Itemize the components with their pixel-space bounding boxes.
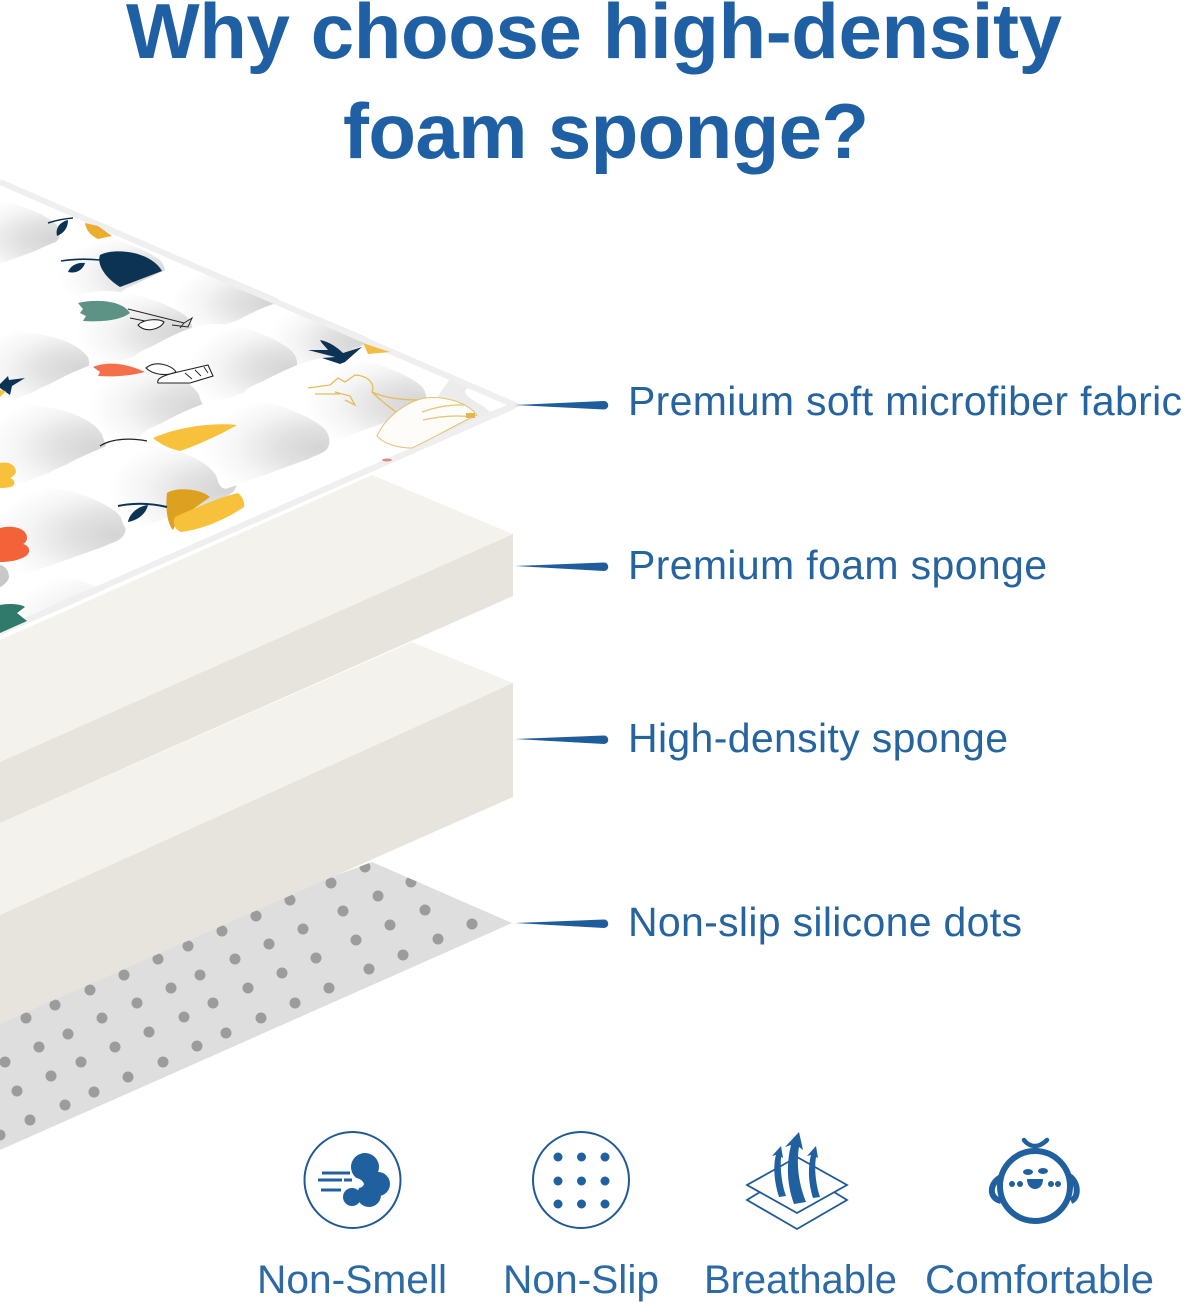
label: non-smell: Non-Smell [257,1258,447,1302]
print: navy fruit [61,251,162,287]
print: orange blob [0,527,29,562]
label: breathable: Breathable [704,1258,897,1302]
leader line: high-density sponge [515,736,608,744]
label: comfortable: Comfortable [925,1258,1154,1302]
print: hand shape [377,398,477,448]
layer: non-slip silicone dots [0,862,512,1150]
print: gray blob [0,565,9,587]
label: non-slip: Non-Slip [503,1258,659,1302]
leader line: silicone dots [515,920,608,928]
icon: non-smell [304,1132,400,1228]
layer: microfiber fabric [0,178,522,669]
label: high-density sponge: High-density sponge [628,715,1008,761]
fabric edge band [0,182,514,632]
print: yellow fruit [118,489,244,532]
layer: premium foam sponge [0,475,513,823]
print: left yellow blob [0,462,16,488]
print: teal flower with outline leaves [78,301,192,330]
icon: breathable [747,1132,847,1229]
label: foam sponge: Premium foam sponge [628,542,1047,588]
print: teal blob [0,604,27,633]
print: orange flower with outline leaves [93,364,213,383]
fabric prints [0,218,477,633]
quilting pattern [0,208,521,620]
icon: comfortable baby face [992,1140,1077,1221]
print: carrot [100,424,237,451]
print: giraffe outline [308,375,421,416]
title [126,0,1062,175]
layer: high-density sponge [0,642,513,1024]
leader line: fabric [515,401,608,410]
print: small leaf and yellow piece [48,218,112,239]
title: foam sponge? [343,87,869,175]
print: navy bird plant [308,340,390,364]
label: fabric: Premium soft microfiber fabric [628,378,1182,424]
label: silicone dots: Non-slip silicone dots [628,899,1022,945]
print: left edge plant [0,376,25,395]
print: small pink mark [382,458,392,462]
leader line: foam sponge [515,562,608,571]
icon: non-slip [533,1132,629,1228]
